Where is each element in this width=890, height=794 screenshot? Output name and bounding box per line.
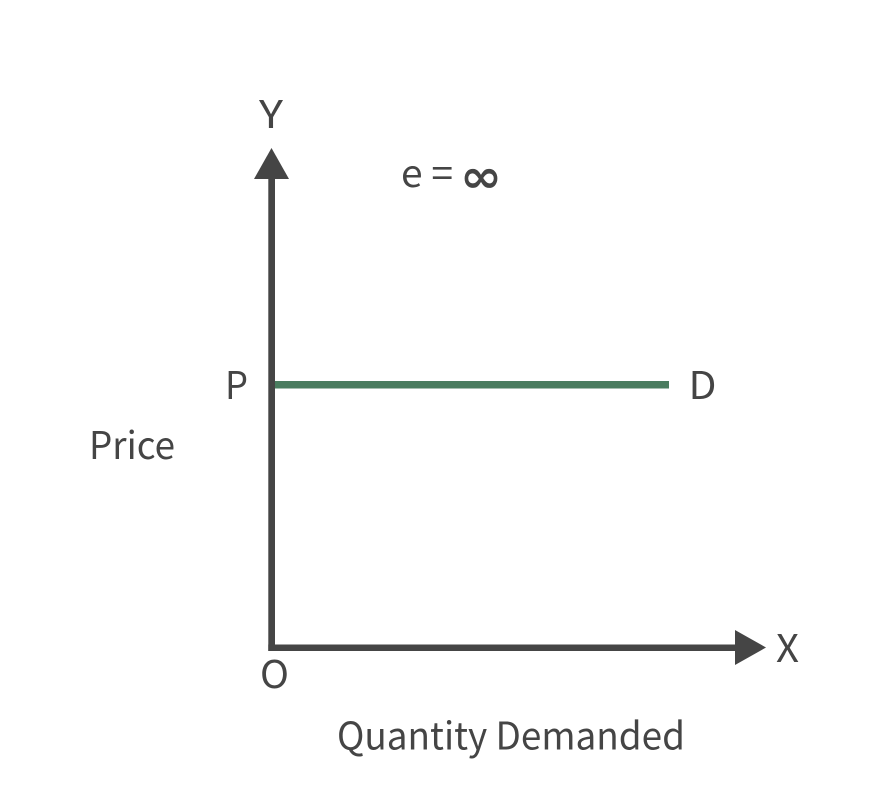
label: D: D — [688, 355, 716, 410]
label: O: O — [260, 644, 289, 699]
label: elasticity: e = — [401, 143, 453, 198]
label: P: P — [225, 355, 248, 410]
label: Quantity Demanded: Quantity Demanded — [337, 706, 685, 760]
label: Y: Y — [258, 84, 284, 139]
demand line — [275, 381, 669, 388]
label: X: X — [776, 618, 799, 673]
y axis with arrow — [254, 148, 289, 651]
label: elasticity — [401, 143, 502, 203]
x axis with arrow — [268, 630, 766, 665]
label: Price: Price — [89, 415, 175, 470]
label: elasticity: ∞ — [460, 149, 502, 203]
